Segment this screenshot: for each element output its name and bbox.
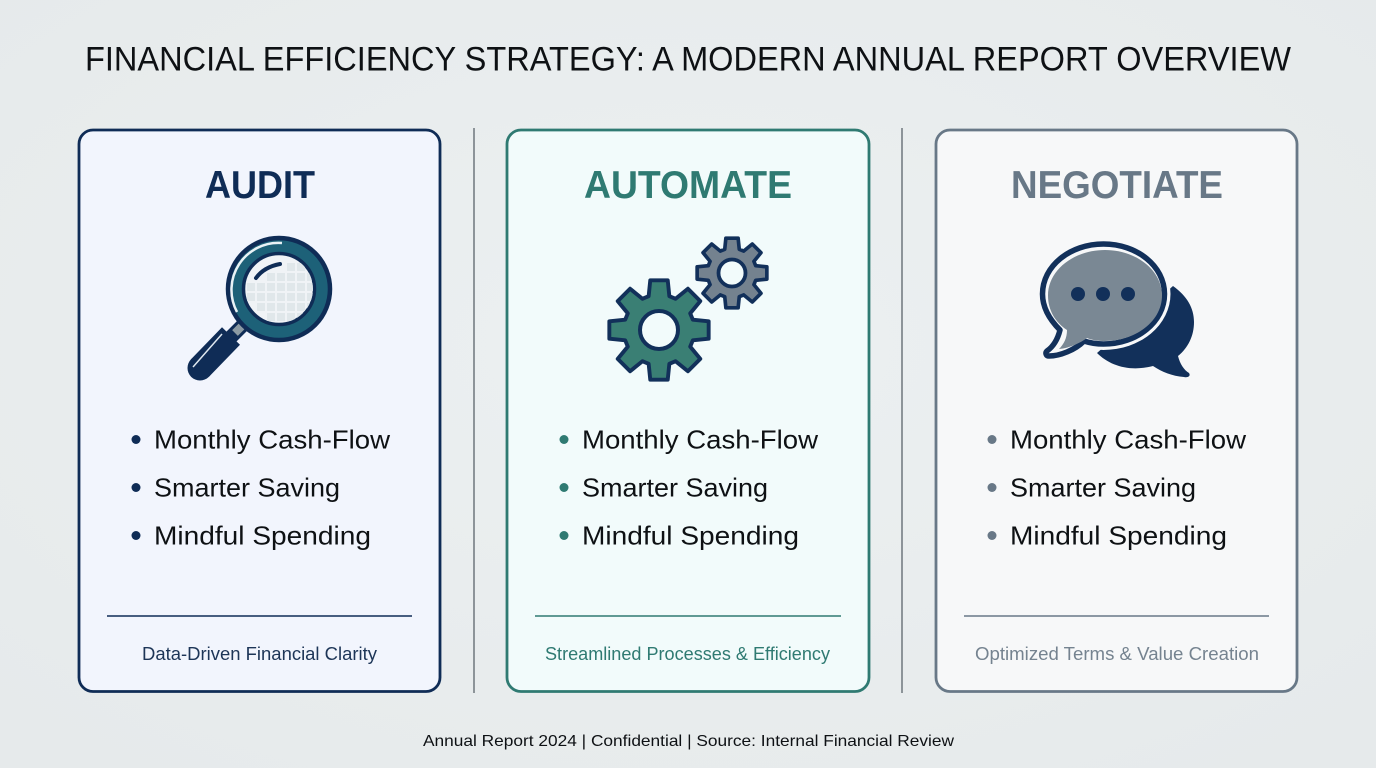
caption: audit: Data-Driven Financial Clarity <box>142 644 377 664</box>
heading: audit: AUDIT <box>205 164 315 207</box>
icon: magnifying glass <box>188 238 330 380</box>
bullet list: automate: Smarter Saving <box>582 472 768 502</box>
panel: negotiate <box>936 130 1297 692</box>
bullet list: audit <box>132 424 390 550</box>
bullet list: automate <box>560 424 818 550</box>
bullet list: negotiate <box>988 424 1246 550</box>
icon: gears <box>609 238 767 380</box>
bullet list: audit: Smarter Saving <box>154 472 340 502</box>
heading: negotiate: NEGOTIATE <box>1011 164 1223 207</box>
icon: speech bubbles <box>1036 238 1194 377</box>
bullet list: negotiate: Mindful Spending <box>1010 520 1227 550</box>
footer: Annual Report 2024 | Confidential | Source: Internal Financial Review <box>423 733 954 750</box>
bullet list: audit: Mindful Spending <box>154 520 371 550</box>
bullet list: negotiate: Smarter Saving <box>1010 472 1196 502</box>
bullet list: negotiate: Monthly Cash-Flow <box>1010 424 1246 454</box>
panel: audit <box>79 130 440 692</box>
bullet list: audit: Monthly Cash-Flow <box>154 424 390 454</box>
title: FINANCIAL EFFICIENCY STRATEGY: A MODERN ANNUAL REPORT OVERVIEW <box>85 40 1291 78</box>
bullet list: automate: Mindful Spending <box>582 520 799 550</box>
caption: automate: Streamlined Processes & Efficiency <box>545 644 830 664</box>
caption: negotiate: Optimized Terms & Value Creation <box>975 644 1259 664</box>
bullet list: automate: Monthly Cash-Flow <box>582 424 818 454</box>
panel: automate <box>507 130 869 692</box>
heading: automate: AUTOMATE <box>584 164 792 207</box>
